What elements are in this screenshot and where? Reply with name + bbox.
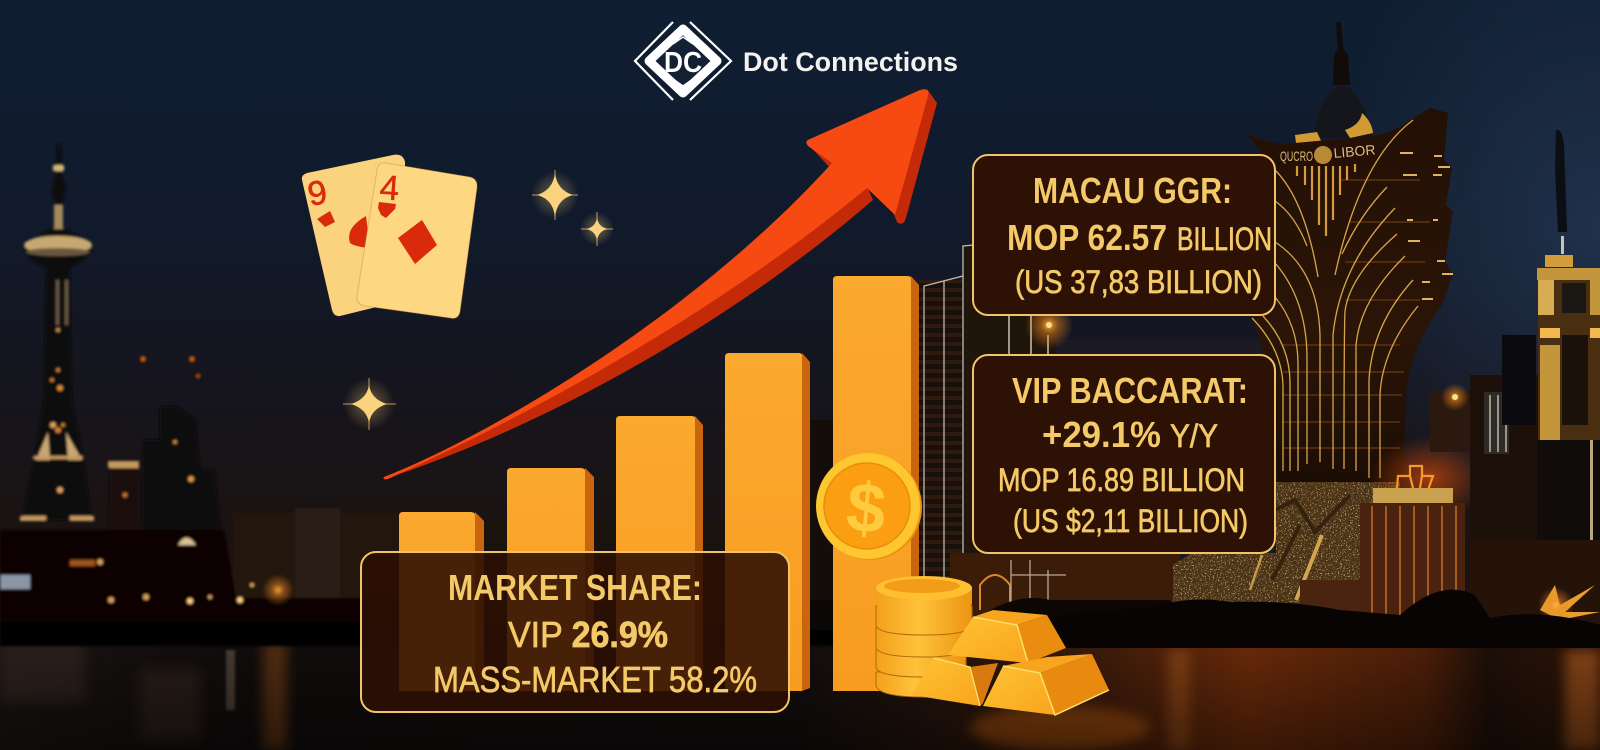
Lisboa sign fringe: LIBOR <box>1333 141 1376 161</box>
dollar coin: $ <box>843 467 889 549</box>
background: central glass towers <box>919 244 1276 630</box>
card: four of diamonds <box>357 163 477 318</box>
heading: market share: MARKET SHARE: <box>448 567 702 608</box>
panel: Macau GGR <box>973 155 1275 315</box>
logo mark: DC diamond <box>635 22 731 100</box>
logo wordmark: Dot Connections <box>743 47 958 77</box>
background: waterfront tree line <box>960 590 1600 648</box>
Lisboa dome and finial <box>1295 22 1373 143</box>
unit: billion: BILLION <box>1177 221 1272 257</box>
panel: market share <box>361 552 789 712</box>
background: left skyline <box>0 356 1600 646</box>
bar chart: rising gold bars <box>399 276 919 691</box>
bar 1 <box>399 512 484 691</box>
logo: Dot Connections <box>635 22 958 100</box>
coin stack <box>876 576 972 697</box>
figure: MOP 16.89 billion: MOP 16.89 BILLION <box>998 462 1245 498</box>
background: right gold tower <box>1470 130 1600 625</box>
bar 5 <box>833 276 919 691</box>
logo mark: DC diamond: DC <box>664 47 702 79</box>
card: nine of diamonds <box>302 155 405 316</box>
growth arrow <box>384 89 937 479</box>
background: central skyline behind bars <box>480 420 960 630</box>
figure: MOP 62.57: MOP 62.57 <box>1007 217 1167 258</box>
playing cards <box>302 155 477 318</box>
heading: VIP baccarat: VIP BACCARAT: <box>1012 370 1248 411</box>
bar 2 <box>507 468 594 691</box>
gold bar: bottom right <box>983 654 1109 715</box>
Lisboa body <box>1246 108 1453 482</box>
gold bar: bottom left <box>912 658 998 706</box>
bar 3 <box>616 416 703 691</box>
background: Grand Lisboa tower <box>1173 22 1453 620</box>
figure: US equivalent: (US 37,83 BILLION) <box>1015 264 1262 300</box>
gold bar: top <box>948 610 1066 663</box>
figure: US $2.11 billion: (US $2,11 BILLION) <box>1013 503 1248 539</box>
text: VIP share: VIP 26.9% <box>508 614 668 655</box>
unit: year on year: Y/Y <box>1170 418 1218 454</box>
gold bars <box>912 610 1109 715</box>
heading: Macau GGR: MACAU GGR: <box>1033 170 1232 211</box>
panel: VIP baccarat <box>973 355 1275 553</box>
figure: +29.1%: +29.1% <box>1042 414 1161 455</box>
text: mass-market share: MASS-MARKET 58.2% <box>433 659 757 700</box>
background: casino building with crown <box>1360 383 1490 620</box>
background: left observation tower <box>20 144 94 521</box>
Lisboa podium <box>1173 482 1400 620</box>
Lisboa sign fringe <box>1280 141 1376 236</box>
river water with reflections <box>0 640 1600 750</box>
sparkles <box>343 170 614 430</box>
card: nine of diamonds: 9 <box>305 173 330 214</box>
bar 4 <box>725 353 810 691</box>
Lisboa sign fringe: QUCRO <box>1280 148 1313 164</box>
card: four of diamonds: 4 <box>378 168 401 208</box>
dollar coin <box>816 453 922 560</box>
